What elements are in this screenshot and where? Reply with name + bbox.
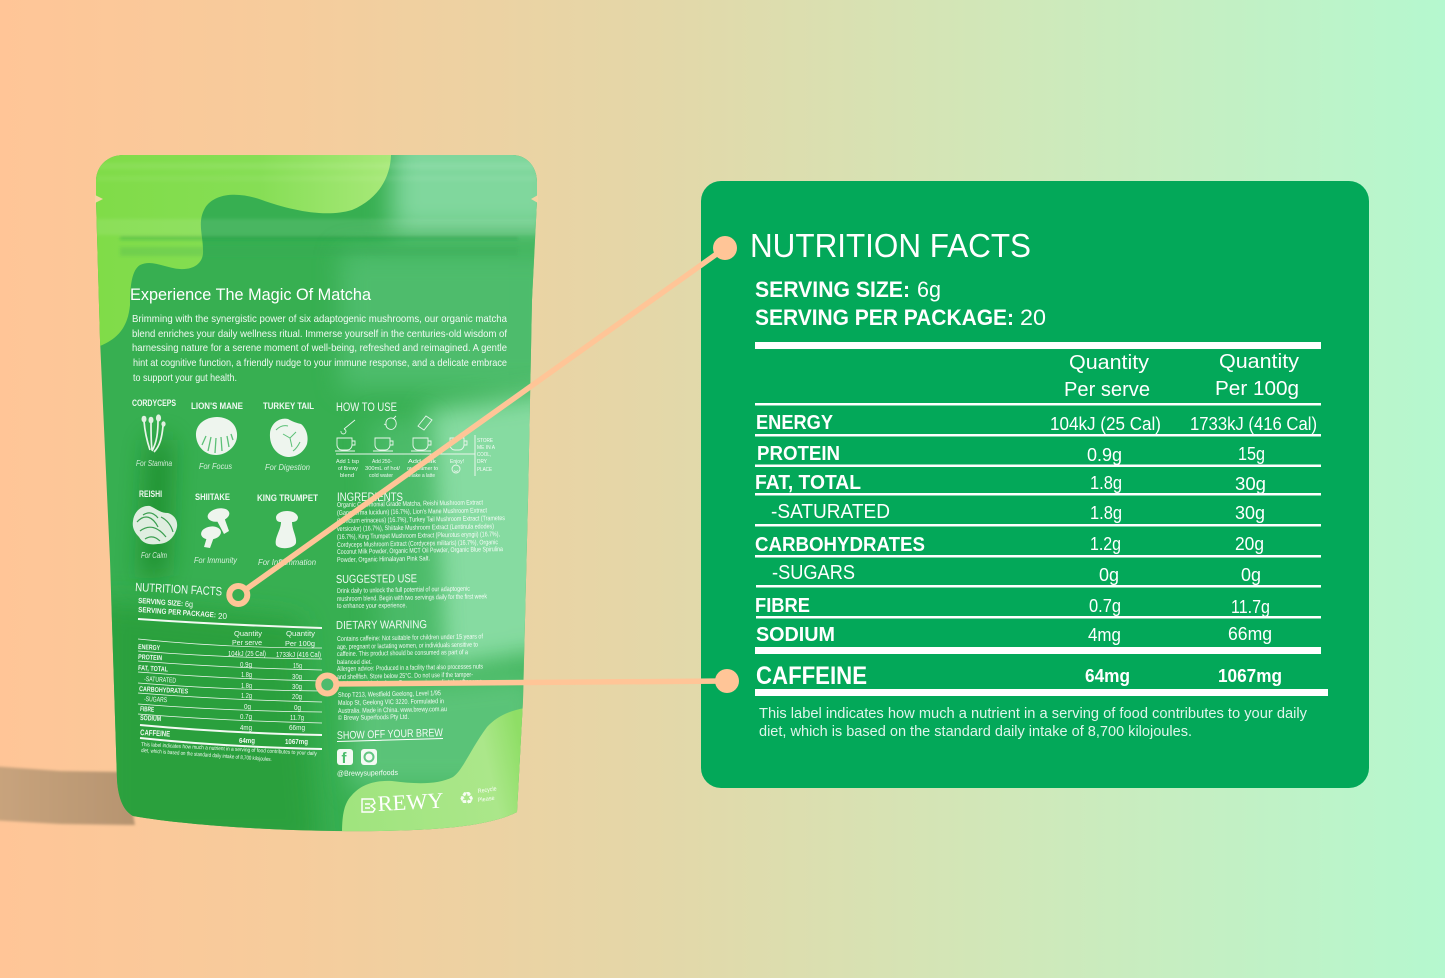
social section: @Brewysuperfoods <box>337 768 398 778</box>
product pouch <box>95 155 538 832</box>
nutrition table text: -SUGARS <box>144 696 167 704</box>
nutrition table text: 0g <box>294 705 301 712</box>
nutrition table text: -SATURATED <box>144 676 176 685</box>
suggested use section: Drink daily to unlock the full potential of our adaptogenic <box>337 586 470 595</box>
table row labels: FAT, TOTAL <box>755 472 861 494</box>
nutrition table text: 1067mg <box>285 739 308 746</box>
pouch body and shading <box>96 155 537 832</box>
table values: 1733kJ (416 Cal) <box>1190 413 1317 434</box>
nutrition table text: 1733kJ (416 Cal) <box>276 652 321 659</box>
nutrition table text: ENERGY <box>138 644 160 652</box>
how to use section: COOL, <box>477 452 491 458</box>
recycle mark: Recycle <box>477 786 498 795</box>
table values: 0g <box>1099 564 1119 585</box>
nutrition table text: 66mg <box>289 725 305 732</box>
pouch nutrition facts: NUTRITION FACTS <box>135 580 222 599</box>
how to use section: make a latte <box>409 473 435 479</box>
ingredients section: (Ganoderma lucidum) (16.7%), Lion's Mane Mushroom Extract <box>337 507 487 517</box>
table row labels: PROTEIN <box>757 443 840 465</box>
mushroom: reishi: For Calm <box>141 550 167 560</box>
table values: 30g <box>1235 473 1266 494</box>
mushroom: turkey tail: TURKEY TAIL <box>263 401 314 411</box>
table column headers <box>1064 350 1300 401</box>
ingredients section: INGREDIENTS <box>337 492 403 504</box>
mushroom: king trumpet: KING TRUMPET <box>257 493 318 503</box>
table values <box>1050 413 1317 645</box>
nutrition table text: 1.8g <box>241 683 252 690</box>
mushroom: king trumpet: For Inflammation <box>258 557 316 567</box>
tear notches <box>95 195 538 203</box>
pouch text and icons <box>130 285 507 816</box>
company address: Shop T213, Westfield Geelong, Level 1/95 <box>338 690 441 699</box>
how to use section: DRY <box>477 459 487 465</box>
mushroom: turkey tail <box>263 401 314 472</box>
panel: nutrition facts detail <box>701 181 1369 788</box>
mushroom: king trumpet <box>257 493 318 567</box>
footnote: diet, which is based on the standard daily intake of 8,700 kilojoules. <box>759 723 1192 740</box>
mushroom: turkey tail: For Digestion <box>265 462 310 472</box>
nutrition table text: CAFFEINE <box>140 728 171 739</box>
nutrition table text: 104kJ (25 Cal) <box>228 651 266 658</box>
ingredients section: Cordyceps Mushroom Extract (Cordyceps militaris) (16.7%), Organic <box>337 539 498 549</box>
nutrition table text: CARBOHYDRATES <box>139 686 188 696</box>
pouch heading: Experience The Magic Of Matcha <box>130 285 372 304</box>
caffeine row <box>756 662 1282 690</box>
nutrition table text: Per 100g <box>285 639 315 648</box>
nutrition table text: 4mg <box>240 725 252 732</box>
how to use section: 300mL of hot/ <box>365 466 400 472</box>
table column headers: Quantity <box>1219 350 1300 373</box>
pouch intro paragraph: hint at cognitive function, a friendly nudge to your immune response, and a delicate embrace <box>133 357 507 369</box>
table values: 15g <box>1238 443 1265 464</box>
dietary warning section: Allergen advice: Produced in a facility that also processes nuts <box>337 663 483 673</box>
dietary warning section: Contains caffeine: Not suitable for children under 15 years of <box>337 633 483 643</box>
dietary warning section: balanced diet. <box>337 659 372 666</box>
dietary warning section: DIETARY WARNING <box>336 619 427 632</box>
ingredients section: (16.7%), King Trumpet Mushroom Extract (Pleurotus eryngii) (16.7%), <box>337 531 500 541</box>
nutrition table text: 64mg <box>239 738 255 745</box>
zipper band <box>96 163 537 256</box>
table rules <box>755 342 1328 696</box>
dietary warning section: evident seal is broken. Consume immediately after use. <box>337 678 484 688</box>
ingredients section: versicolor) (16.7%), Shiitake Mushroom Extract (Lentinula edodes) <box>337 523 494 533</box>
pouch nutrition facts: 20 <box>218 612 228 621</box>
social section: SHOW OFF YOUR BREW <box>337 727 444 742</box>
mushroom: cordyceps <box>132 398 176 468</box>
table row labels: FIBRE <box>755 595 810 617</box>
table values: 0g <box>1241 564 1261 585</box>
table values: 4mg <box>1088 624 1121 645</box>
table values: 0.9g <box>1087 444 1122 465</box>
callout connector: caffeine <box>318 669 739 694</box>
nutrition table text: FAT, TOTAL <box>138 665 169 674</box>
nutrition table text: 15g <box>293 663 302 670</box>
nutrition table text: 30g <box>292 684 302 691</box>
dietary warning section <box>336 619 484 688</box>
recycle mark: ♻ <box>459 789 474 809</box>
icon: instagram <box>361 749 377 765</box>
table column headers: Quantity <box>1069 351 1150 374</box>
nutrition table text: 20g <box>292 694 302 701</box>
footnote <box>759 705 1307 740</box>
mushroom: cordyceps: For Stamina <box>136 458 172 468</box>
brand logo: REWY <box>377 788 444 816</box>
pouch nutrition facts: 6g <box>185 600 193 609</box>
how to use section: cold water <box>369 473 393 479</box>
how to use section: STORE <box>477 438 493 444</box>
nutrition table text: FIBRE <box>140 706 154 714</box>
serving info: 6g <box>917 277 941 302</box>
how-to icons <box>335 416 467 473</box>
suggested use section: to enhance your experience. <box>337 602 407 610</box>
mushroom: reishi <box>133 489 177 560</box>
nutrition table text: Quantity <box>234 629 262 638</box>
nutrition table text: 0.7g <box>240 714 252 721</box>
pouch intro paragraph: Brimming with the synergistic power of six adaptogenic mushrooms, our organic matcha <box>132 313 507 325</box>
suggested use section: mushroom blend. Begin with two servings daily for the first week <box>337 593 487 603</box>
table row labels: -SATURATED <box>771 501 890 523</box>
how to use section: ME IN A <box>477 445 495 451</box>
nutrition table rules <box>138 619 322 749</box>
how to use section: PLACE <box>477 467 492 473</box>
nutrition table text: Quantity <box>286 629 315 638</box>
caffeine row: CAFFEINE <box>756 662 867 690</box>
callout connector: nutrition facts <box>229 236 737 604</box>
caffeine row: 1067mg <box>1218 665 1282 686</box>
mushroom: lion's mane: LION'S MANE <box>191 401 243 411</box>
ingredients section: (Hericium erinaceus) (16.7%), Turkey Tail Mushroom Extract (Trametes <box>337 515 505 525</box>
pouch nutrition facts: SERVING PER PACKAGE: <box>138 605 216 619</box>
caffeine row: 64mg <box>1085 665 1130 686</box>
ingredients section: Powder, Organic Himalayan Pink Salt. <box>337 555 430 564</box>
mushroom: shiitake: For Immunity <box>194 555 238 565</box>
nutrition table text: 0.9g <box>240 662 252 669</box>
table values: 1.8g <box>1090 472 1122 493</box>
dietary warning section: caffeine. This product should be consumed as part of a <box>337 649 468 658</box>
company address: Malop St, Geelong VIC 3220. Formulated in <box>338 698 444 707</box>
suggested use section <box>336 573 487 610</box>
nutrition table text: Per serve <box>232 638 262 647</box>
nutrition table text: 1.8g <box>241 672 252 679</box>
pouch intro paragraph: to support your gut health. <box>133 372 237 384</box>
table values: 20g <box>1235 533 1264 554</box>
ingredients section: Coconut Milk Powder, Organic MCT Oil Powder, Organic Blue Spirulina <box>337 546 503 556</box>
company address: Australia. Made in China. www.brewy.com.au <box>338 706 447 715</box>
how to use section: Add milk <box>408 459 436 465</box>
table column headers: Per 100g <box>1215 377 1299 400</box>
serving info: SERVING PER PACKAGE: <box>755 305 1014 330</box>
how to use section: blend <box>340 473 354 479</box>
nutrition table text: 0g <box>244 704 251 711</box>
dietary warning section: and shellfish. Store below 25°C. Do not use if the tamper- <box>337 671 473 681</box>
pouch nutrition facts: SERVING SIZE: <box>138 596 183 608</box>
company address: © Brewy Superfoods Pty Ltd. <box>338 713 409 722</box>
pouch nutrition note: diet, which is based on the standard daily intake of 8,700 kilojoules. <box>141 748 272 763</box>
nutrition table text: 1.2g <box>241 693 252 700</box>
company address <box>338 690 447 722</box>
serving info <box>755 277 1046 330</box>
table values: 1.2g <box>1090 533 1121 554</box>
pouch intro paragraph <box>132 313 507 384</box>
nutrition table text: SODIUM <box>140 715 161 723</box>
social section <box>337 727 444 778</box>
how to use section: Add 250- <box>372 459 392 465</box>
table values: 1.8g <box>1090 502 1122 523</box>
table row labels: SODIUM <box>756 624 835 646</box>
pouch intro paragraph: harnessing nature for a serene moment of well-being, refreshed and reimagined. A gentle <box>132 342 507 354</box>
mushroom: lion's mane <box>191 401 243 471</box>
ingredients section: Organic Ceremonial Grade Matcha, Reishi Mushroom Extract <box>337 499 483 509</box>
recycle mark <box>459 786 498 809</box>
table row labels: ENERGY <box>756 412 834 434</box>
table values: 66mg <box>1228 623 1272 644</box>
how to use section <box>335 402 495 479</box>
yellow-green top blob <box>90 150 391 348</box>
how to use section: or creamer to <box>407 466 438 472</box>
nutrition table text: PROTEIN <box>138 654 162 662</box>
table values: 0.7g <box>1089 595 1121 616</box>
table row labels <box>755 412 925 646</box>
bag cast shadow <box>0 766 135 825</box>
table values: 30g <box>1235 502 1265 523</box>
mushroom: cordyceps: CORDYCEPS <box>132 398 176 408</box>
pouch intro paragraph: blend enriches your daily wellness ritual. Immerse yourself in the centuries-old wisdom of <box>132 328 507 340</box>
pouch bottom-right blob <box>342 707 530 835</box>
footnote: This label indicates how much a nutrient in a serving of food contributes to your daily <box>759 705 1307 722</box>
table column headers: Per serve <box>1064 378 1150 401</box>
how to use section: of Brewy <box>338 466 358 472</box>
table row labels: -SUGARS <box>772 562 855 584</box>
table values: 104kJ (25 Cal) <box>1050 413 1161 434</box>
dietary warning section: age, pregnant or lactating women, or individuals sensitive to <box>337 642 478 651</box>
pouch nutrition note <box>141 742 317 763</box>
nutrition table text <box>138 629 321 746</box>
mushroom: shiitake <box>194 492 238 565</box>
mushroom: lion's mane: For Focus <box>199 461 233 471</box>
mushroom: shiitake: SHIITAKE <box>195 492 230 502</box>
pouch nutrition facts <box>135 580 322 763</box>
nutrition table text: 11.7g <box>290 715 304 722</box>
how to use section: Add 1 tsp <box>336 459 359 465</box>
recycle mark: Please <box>477 796 496 804</box>
table row labels: CARBOHYDRATES <box>755 534 925 556</box>
ingredients section <box>337 492 505 564</box>
pouch nutrition note: This label indicates how much a nutrient in a serving of food contributes to your daily <box>141 742 317 757</box>
nutrition table text: 30g <box>292 674 302 681</box>
mushroom: reishi: REISHI <box>139 489 162 499</box>
panel heading: NUTRITION FACTS <box>750 227 1031 264</box>
icon: facebook: f <box>342 750 348 767</box>
table values: 11.7g <box>1231 596 1270 617</box>
how to use section: Enjoy! <box>450 459 464 465</box>
how to use section: HOW TO USE <box>336 402 397 414</box>
suggested use section: SUGGESTED USE <box>336 573 417 586</box>
serving info: 20 <box>1020 305 1046 330</box>
serving info: SERVING SIZE: <box>755 277 910 302</box>
